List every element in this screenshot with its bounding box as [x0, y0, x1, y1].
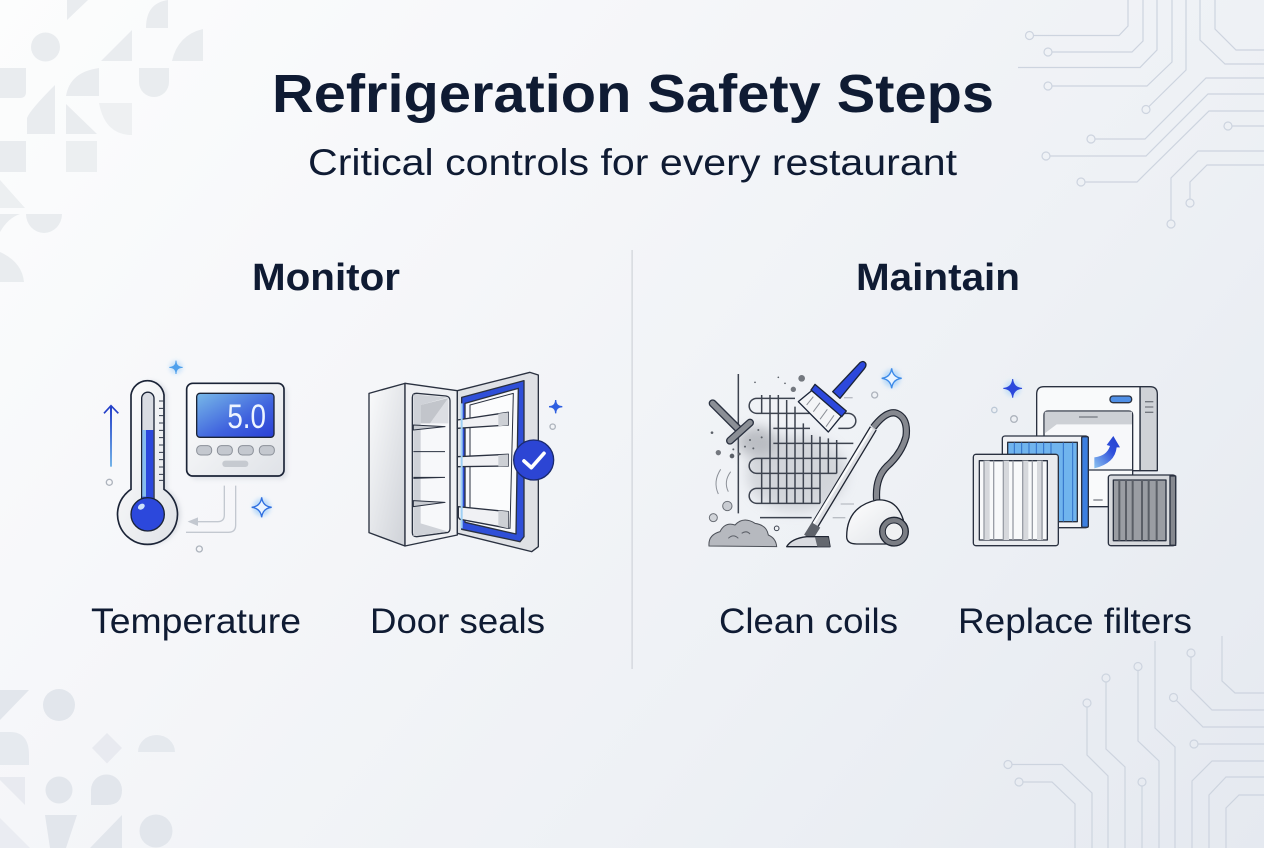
temperature rising arrow [104, 406, 118, 467]
icon: replacing air filters [973, 379, 1176, 546]
heading: Monitor: Monitor [252, 257, 400, 299]
condenser coil grid [738, 374, 856, 518]
fridge door with blue gasket [457, 372, 538, 552]
sparkle and dot [549, 400, 562, 429]
air handling unit [1037, 387, 1157, 507]
thermometer [117, 381, 181, 544]
label: Replace filters: Replace filters [958, 602, 1192, 641]
label: Temperature: Temperature [91, 602, 301, 641]
scraper tool [713, 403, 750, 441]
decorative geometric shapes: top left [0, 0, 203, 282]
decorative circuit traces: bottom right [1004, 636, 1264, 848]
clean white filter [973, 454, 1058, 546]
decorative geometric shapes: bottom left [0, 689, 175, 848]
center divider [632, 250, 633, 669]
thermostat display [187, 383, 287, 479]
blue filter [1002, 436, 1088, 528]
fridge cabinet [369, 383, 457, 546]
coil dashes and motion arcs [716, 398, 854, 518]
icon: thermometer and digital thermostat [104, 361, 287, 552]
dust dots and sparkle [709, 368, 902, 531]
title: Refrigeration Safety Steps [272, 64, 994, 124]
icon: cleaning coils with brush and vacuum [709, 361, 908, 547]
sparkles and dots [106, 361, 272, 552]
label: Clean coils: Clean coils [719, 602, 898, 641]
dust cloud [737, 427, 847, 512]
thermostat display: 5.0 [227, 398, 266, 436]
wiring arrow [186, 486, 236, 532]
subtitle: Critical controls for every restaurant [308, 142, 958, 183]
dirty grey filter [1108, 475, 1176, 546]
dust particles [711, 375, 805, 458]
check badge [514, 440, 554, 480]
hand brush [798, 361, 866, 432]
sparkle and dots [992, 379, 1022, 422]
icon: open refrigerator with door seal check [369, 372, 562, 552]
curved upward arrow [1094, 436, 1120, 468]
dirt pile [709, 520, 777, 547]
heading: Maintain: Maintain [856, 257, 1020, 299]
vacuum cleaner [787, 413, 908, 547]
decorative circuit traces: top right [1018, 0, 1264, 228]
label: Door seals: Door seals [370, 602, 545, 641]
